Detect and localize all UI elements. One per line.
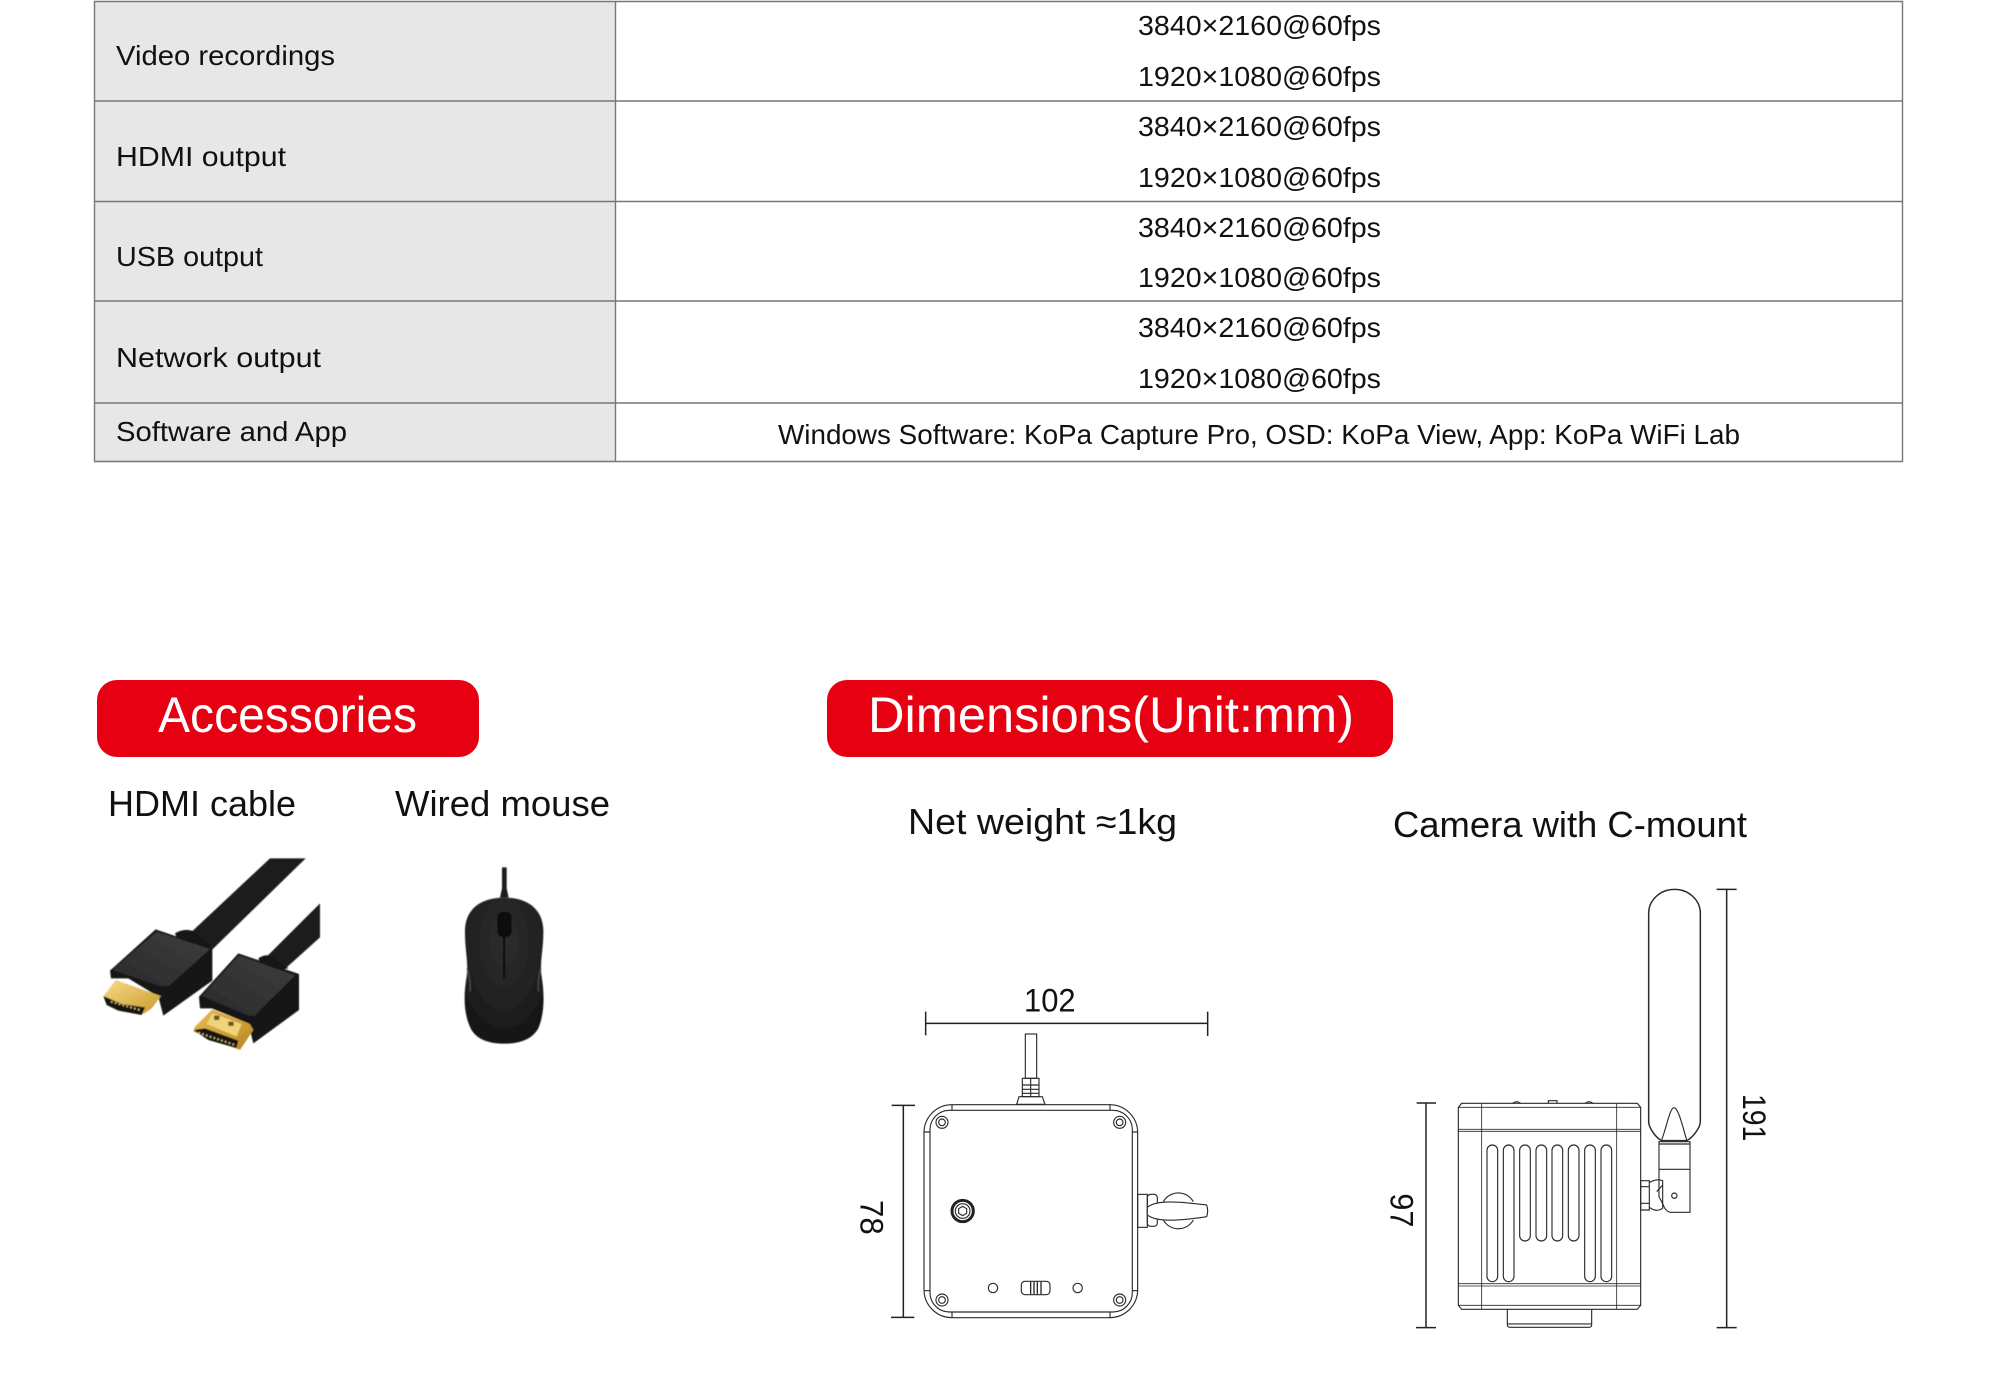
top cable connector [1017,1034,1045,1104]
row: software and app: Software and App [116,416,347,447]
dimension: height 97 [1384,1103,1436,1328]
row: USB output: USB output [116,241,263,272]
switch and indicators [988,1281,1082,1295]
label: net weight: Net weight ≈1kg [908,801,1177,842]
dimension drawing: front view [854,983,1208,1318]
heading: dimensions: Dimensions(Unit:mm) [868,687,1354,743]
row: USB output [94,201,1381,301]
row: network output: 3840×2160@60fps [1138,312,1381,343]
dimension: width 102: 102 [1024,983,1076,1019]
camera body [1458,1101,1641,1309]
row: HDMI output [94,101,1381,201]
antenna [1641,889,1700,1212]
row: HDMI output: 1920×1080@60fps [1138,162,1381,193]
dimension drawing: side view with antenna [1384,889,1772,1328]
row: HDMI output: 3840×2160@60fps [1138,111,1381,142]
specification table [94,1,1903,462]
C-mount lens ring [1507,1309,1592,1327]
label: HDMI cable: HDMI cable [108,783,296,824]
row: network output [94,301,1381,403]
heading: dimensions [827,680,1393,757]
row: USB output: 3840×2160@60fps [1138,212,1381,243]
icon: HDMI cable [103,858,320,1050]
row: video recordings [94,1,1381,101]
mounting screw [952,1200,973,1222]
row: USB output: 1920×1080@60fps [1138,262,1381,293]
side knob [1138,1193,1208,1229]
icon: wired mouse [465,867,544,1044]
row: video recordings: 3840×2160@60fps [1138,10,1381,41]
row: software and app: Windows Software: KoPa Capture Pro, OSD: KoPa View, App: KoPa WiFi Lab [778,419,1740,450]
label: camera with C-mount: Camera with C-mount [1393,804,1747,845]
row: network output: 1920×1080@60fps [1138,363,1381,394]
corner screws [936,1116,1126,1306]
vent slots [1487,1145,1612,1282]
dimension: overall height 191: 191 [1736,1094,1772,1141]
heading: accessories: Accessories [158,687,417,743]
row: software and app [94,403,1740,462]
row: video recordings: 1920×1080@60fps [1138,61,1381,92]
camera body outline [924,1105,1138,1318]
row: video recordings: Video recordings [116,40,335,71]
dimension: height 97: 97 [1384,1193,1420,1227]
heading: accessories [97,680,479,757]
dimension: height 78: 78 [854,1200,890,1235]
dimension: height 78 [854,1105,915,1317]
dimension: overall height 191 [1717,889,1772,1328]
dimension: width 102 [926,983,1208,1036]
row: HDMI output: HDMI output [116,141,286,172]
row: network output: Network output [116,342,321,373]
label: wired mouse: Wired mouse [395,783,610,824]
